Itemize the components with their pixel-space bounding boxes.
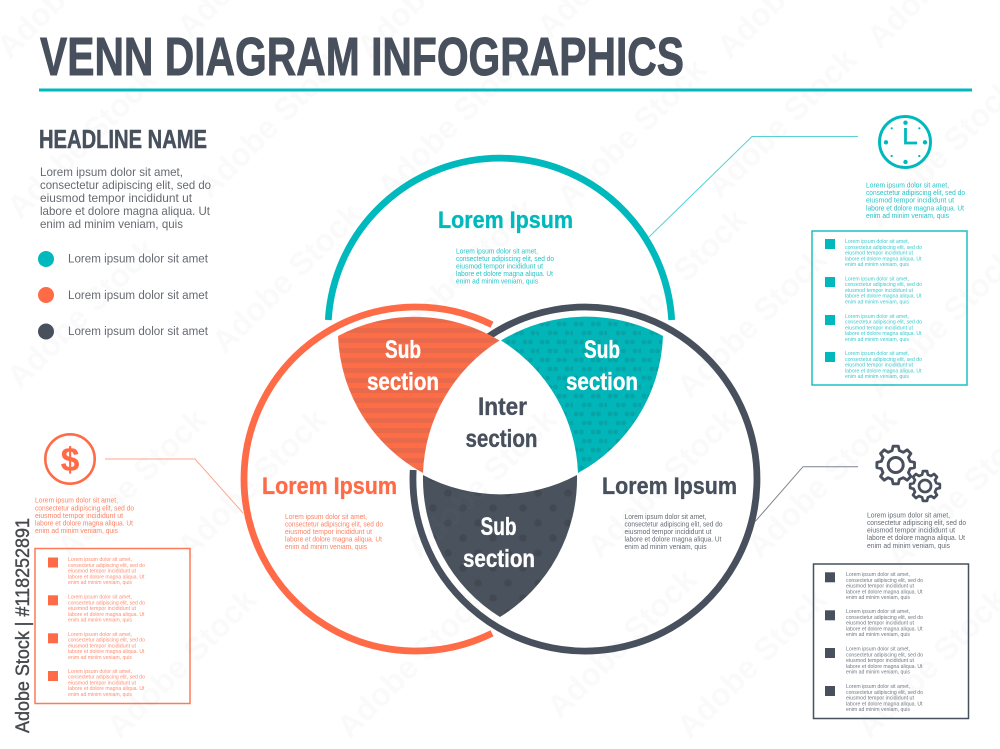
orange callout text: eiusmod tempor incididunt ut xyxy=(35,511,123,520)
dark callout xyxy=(755,446,968,718)
dark list box: eiusmod tempor incididunt ut xyxy=(846,584,914,590)
intro paragraph: labore et dolore magna aliqua. Ut xyxy=(40,204,211,218)
watermark: Adobe Stock xyxy=(669,241,833,405)
teal circle label: Lorem Ipsum xyxy=(438,207,573,234)
teal sub section: Sub xyxy=(584,336,620,364)
left intro panel xyxy=(38,124,211,340)
dark callout text: labore et dolore magna aliqua. Ut xyxy=(867,533,965,542)
orange list box: eiusmod tempor incididunt ut xyxy=(68,680,136,686)
dark sub section: Sub xyxy=(480,513,516,541)
icon: dollar coin: $ xyxy=(61,441,79,478)
orange circle label xyxy=(262,473,397,551)
orange ring xyxy=(244,307,492,651)
dark list box: labore et dolore magna aliqua. Ut xyxy=(846,664,923,670)
dark callout text: Lorem ipsum dolor sit amet, xyxy=(867,510,950,519)
teal ring xyxy=(328,158,672,320)
dark list box: labore et dolore magna aliqua. Ut xyxy=(846,589,923,595)
orange circle label: enim ad minim veniam, quis xyxy=(285,542,367,551)
teal circle label xyxy=(438,207,573,286)
dark callout text xyxy=(867,510,966,550)
headline: HEADLINE NAME xyxy=(39,124,207,154)
intersection label xyxy=(466,393,538,453)
watermark: Adobe Stock xyxy=(169,401,333,565)
watermark: Adobe Stock xyxy=(99,581,263,745)
dark callout text: consectetur adipiscing elit, sed do xyxy=(867,518,966,527)
watermark: Adobe Stock xyxy=(589,201,753,365)
teal list box: eiusmod tempor incididunt ut xyxy=(845,363,913,369)
watermark: Adobe Stock xyxy=(329,581,493,745)
teal list box: enim ad minim veniam, quis xyxy=(845,299,909,305)
icon: dollar coin xyxy=(45,434,95,484)
legend: Lorem ipsum dolor sit amet xyxy=(68,254,209,266)
watermark: Adobe Stock xyxy=(539,561,703,725)
orange callout text: Lorem ipsum dolor sit amet, xyxy=(35,496,118,505)
dark list box: Lorem ipsum dolor sit amet, xyxy=(846,572,910,578)
dark circle label: eiusmod tempor incididunt ut xyxy=(624,527,712,536)
dark list box: enim ad minim veniam, quis xyxy=(846,707,910,713)
dark list box: consectetur adipiscing elit, sed do xyxy=(846,615,923,621)
orange callout text xyxy=(35,496,134,535)
teal callout text: eiusmod tempor incididunt ut xyxy=(866,196,954,205)
teal list box: labore et dolore magna aliqua. Ut xyxy=(845,294,922,300)
dark list box: enim ad minim veniam, quis xyxy=(846,595,910,601)
teal leader line xyxy=(649,136,858,237)
teal list box xyxy=(812,231,967,385)
orange list box: enim ad minim veniam, quis xyxy=(68,618,132,624)
orange list box: consectetur adipiscing elit, sed do xyxy=(68,675,145,681)
orange list box: labore et dolore magna aliqua. Ut xyxy=(68,686,145,692)
orange circle label: labore et dolore magna aliqua. Ut xyxy=(285,535,382,544)
teal list box: enim ad minim veniam, quis xyxy=(845,374,909,380)
watermark: Adobe Stock xyxy=(204,196,368,360)
dark circle label: labore et dolore magna aliqua. Ut xyxy=(624,535,722,544)
orange list box: Lorem ipsum dolor sit amet, xyxy=(68,669,132,675)
intersection label: section xyxy=(466,425,538,453)
dark circle label: Lorem ipsum dolor sit amet, xyxy=(624,512,706,521)
dark sub section xyxy=(423,475,577,617)
watermark: Adobe Stock xyxy=(579,401,743,565)
teal sub section xyxy=(501,317,663,473)
intro paragraph: Lorem ipsum dolor sit amet, xyxy=(40,165,183,179)
orange list box: eiusmod tempor incididunt ut xyxy=(68,568,136,574)
dark list box: eiusmod tempor incididunt ut xyxy=(846,620,914,626)
dark list box: enim ad minim veniam, quis xyxy=(846,670,910,676)
dark list box xyxy=(814,564,968,718)
orange list box: enim ad minim veniam, quis xyxy=(68,692,132,698)
teal circle label: labore et dolore magna aliqua. Ut xyxy=(456,269,553,278)
orange sub section xyxy=(338,317,500,473)
intersection label: Inter xyxy=(478,393,527,421)
orange leader line xyxy=(105,459,243,513)
orange sub section: section xyxy=(367,368,439,396)
watermark: Adobe Stock xyxy=(699,41,863,205)
orange list box: Lorem ipsum dolor sit amet, xyxy=(68,632,132,638)
orange list box: consectetur adipiscing elit, sed do xyxy=(68,563,145,569)
dark list box: labore et dolore magna aliqua. Ut xyxy=(846,701,923,707)
orange list box: consectetur adipiscing elit, sed do xyxy=(68,638,145,644)
teal list box: Lorem ipsum dolor sit amet, xyxy=(845,239,909,245)
dark leader line xyxy=(755,467,858,522)
venn diagram xyxy=(244,158,757,651)
orange list box: Lorem ipsum dolor sit amet, xyxy=(68,594,132,600)
orange list box: eiusmod tempor incididunt ut xyxy=(68,606,136,612)
dark list box: consectetur adipiscing elit, sed do xyxy=(846,690,923,696)
teal list box: labore et dolore magna aliqua. Ut xyxy=(845,331,922,337)
teal list box: labore et dolore magna aliqua. Ut xyxy=(845,368,922,374)
orange list box: enim ad minim veniam, quis xyxy=(68,580,132,586)
teal circle label: enim ad minim veniam, quis xyxy=(456,277,538,286)
teal list box: consectetur adipiscing elit, sed do xyxy=(845,282,922,288)
teal list box: consectetur adipiscing elit, sed do xyxy=(845,320,922,326)
orange callout text: labore et dolore magna aliqua. Ut xyxy=(35,519,133,528)
watermark: Adobe Stock xyxy=(0,61,163,225)
orange callout xyxy=(35,434,243,704)
teal sub section: section xyxy=(566,368,638,396)
orange list box: enim ad minim veniam, quis xyxy=(68,655,132,661)
dark list box: consectetur adipiscing elit, sed do xyxy=(846,652,923,658)
teal list box: enim ad minim veniam, quis xyxy=(845,337,909,343)
icon: clock xyxy=(880,116,930,168)
watermark: Adobe Stock xyxy=(399,401,563,565)
dark list box: consectetur adipiscing elit, sed do xyxy=(846,578,923,584)
orange sub section: Sub xyxy=(385,336,421,364)
teal callout text: labore et dolore magna aliqua. Ut xyxy=(866,203,964,212)
dark list box: labore et dolore magna aliqua. Ut xyxy=(846,626,923,632)
orange list box: Lorem ipsum dolor sit amet, xyxy=(68,557,132,563)
dark circle label xyxy=(602,473,737,551)
legend: Lorem ipsum dolor sit amet xyxy=(68,326,209,338)
teal list box: consectetur adipiscing elit, sed do xyxy=(845,357,922,363)
teal circle label: Lorem ipsum dolor sit amet, xyxy=(456,247,538,256)
teal list box: consectetur adipiscing elit, sed do xyxy=(845,245,922,251)
title underline xyxy=(39,88,972,92)
watermark: Adobe Stock xyxy=(739,401,903,565)
teal list box: Lorem ipsum dolor sit amet, xyxy=(845,314,909,320)
teal circle label: consectetur adipiscing elit, sed do xyxy=(456,254,554,263)
dark circle label: enim ad minim veniam, quis xyxy=(624,542,707,551)
watermark: Adobe Stock xyxy=(189,41,353,205)
title: VENN DIAGRAM INFOGRAPHICS xyxy=(40,27,684,87)
dark callout text: enim ad minim veniam, quis xyxy=(867,541,950,550)
watermark: Adobe Stock xyxy=(0,231,163,395)
orange circle label: consectetur adipiscing elit, sed do xyxy=(285,520,383,529)
orange circle label: Lorem Ipsum xyxy=(262,473,397,500)
dark list box: Lorem ipsum dolor sit amet, xyxy=(846,609,910,615)
dark circle label: Lorem Ipsum xyxy=(602,473,737,500)
dark circle label: consectetur adipiscing elit, sed do xyxy=(624,520,722,529)
dark list box: enim ad minim veniam, quis xyxy=(846,632,910,638)
teal list box: Lorem ipsum dolor sit amet, xyxy=(845,351,909,357)
teal list box: Lorem ipsum dolor sit amet, xyxy=(845,276,909,282)
orange list box: labore et dolore magna aliqua. Ut xyxy=(68,612,145,618)
dark list box: Lorem ipsum dolor sit amet, xyxy=(846,646,910,652)
teal callout text: Lorem ipsum dolor sit amet, xyxy=(866,180,949,190)
orange list box: eiusmod tempor incididunt ut xyxy=(68,643,136,649)
watermark: Adobe Stock xyxy=(549,51,713,215)
watermark: Adobe Stock xyxy=(379,191,543,355)
orange callout text: enim ad minim veniam, quis xyxy=(35,526,118,535)
vertical stock id: Adobe Stock | #118252891 xyxy=(13,518,34,733)
teal list box: enim ad minim veniam, quis xyxy=(845,262,909,268)
teal list box: labore et dolore magna aliqua. Ut xyxy=(845,256,922,262)
orange list box: labore et dolore magna aliqua. Ut xyxy=(68,574,145,580)
dark ring xyxy=(413,307,757,651)
teal list box: eiusmod tempor incididunt ut xyxy=(845,325,913,331)
teal list box: eiusmod tempor incididunt ut xyxy=(845,288,913,294)
teal callout text: enim ad minim veniam, quis xyxy=(866,211,949,220)
dark list box: Lorem ipsum dolor sit amet, xyxy=(846,684,910,690)
orange list box: consectetur adipiscing elit, sed do xyxy=(68,600,145,606)
dark list box: eiusmod tempor incididunt ut xyxy=(846,658,914,664)
teal list box: eiusmod tempor incididunt ut xyxy=(845,250,913,256)
icon: gears xyxy=(877,446,940,501)
dark callout text: eiusmod tempor incididunt ut xyxy=(867,526,955,535)
dark list box: eiusmod tempor incididunt ut xyxy=(846,696,914,702)
teal circle label: eiusmod tempor incididunt ut xyxy=(456,262,543,271)
orange circle label: eiusmod tempor incididunt ut xyxy=(285,527,372,536)
watermark: Adobe Stock xyxy=(669,581,833,745)
orange list box: labore et dolore magna aliqua. Ut xyxy=(68,649,145,655)
intro paragraph: enim ad minim veniam, quis xyxy=(40,217,183,231)
teal callout xyxy=(649,116,967,385)
intro paragraph: consectetur adipiscing elit, sed do xyxy=(40,178,211,192)
teal callout text xyxy=(866,180,965,220)
teal callout text: consectetur adipiscing elit, sed do xyxy=(866,188,965,197)
watermark: Adobe Stock xyxy=(49,401,213,565)
legend: Lorem ipsum dolor sit amet xyxy=(68,290,209,302)
watermark: Adobe Stock xyxy=(369,41,533,205)
dark sub section: section xyxy=(463,545,535,573)
legend xyxy=(38,251,209,340)
orange callout text: consectetur adipiscing elit, sed do xyxy=(35,503,134,512)
orange circle label: Lorem ipsum dolor sit amet, xyxy=(285,512,367,521)
orange list box xyxy=(35,548,190,704)
intro paragraph: eiusmod tempor incididunt ut xyxy=(40,191,193,205)
intro paragraph xyxy=(40,165,211,231)
